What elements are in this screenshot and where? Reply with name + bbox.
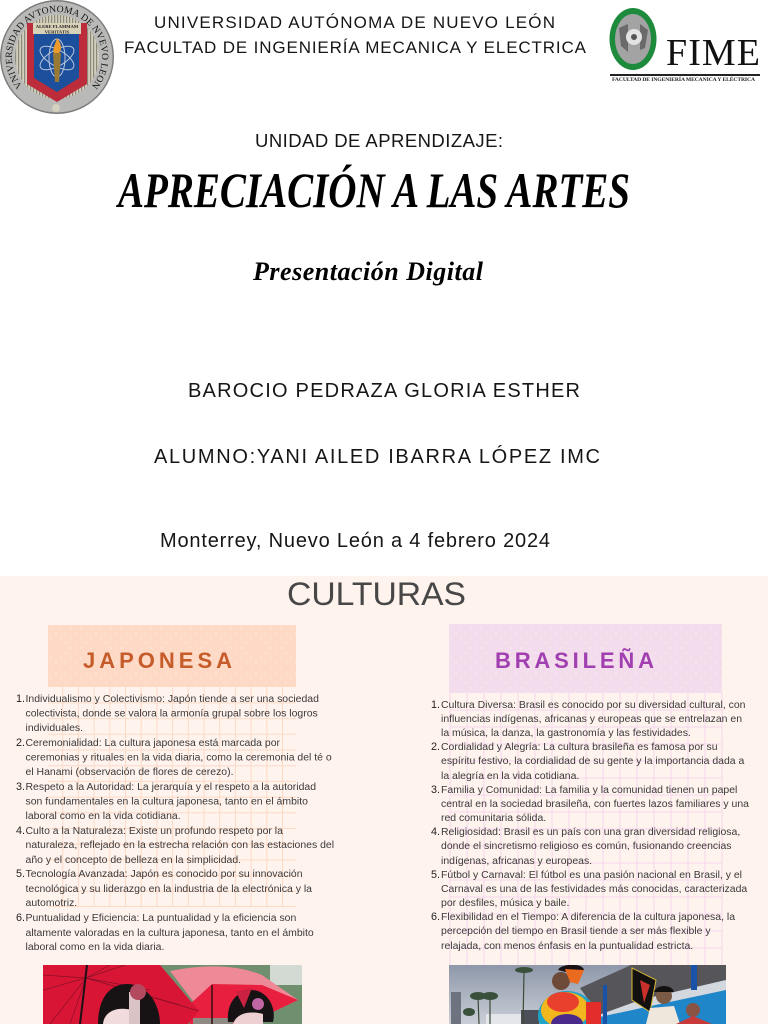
photo: geishas with red umbrellas bbox=[43, 965, 302, 1024]
list: japonesa: 5. bbox=[16, 868, 25, 880]
list: japonesa: naturaleza, reflejado en la estrecha relación con las estaciones del bbox=[26, 840, 334, 851]
list: brasileña: indígenas, africanas y europeas. bbox=[441, 856, 592, 867]
label: unidad de aprendizaje: UNIDAD DE APRENDIZAJE: bbox=[255, 130, 503, 151]
list: japonesa: Ceremonialidad: La cultura japonesa está marcada por bbox=[26, 738, 281, 749]
list: japonesa: 6. bbox=[16, 912, 25, 924]
list: brasileña: por desfiles, música y baile. bbox=[441, 898, 569, 909]
list: brasileña: Cordialidad y Alegría: La cultura brasileña es famosa por su bbox=[441, 742, 718, 753]
list: japonesa: individuales. bbox=[26, 723, 83, 734]
teacher name: BAROCIO PEDRAZA GLORIA ESTHER bbox=[188, 380, 580, 402]
icon: UANL university seal: VNIVERSIDAD AVTONOMA DE NVEVO LEON bbox=[6, 6, 108, 90]
icon: UANL university seal: VERITATIS bbox=[45, 30, 70, 34]
list: japonesa: tecnológica y su liderazgo en la industria de la electrónica y la bbox=[26, 884, 312, 895]
list: japonesa: año y el concepto de belleza en la simplicidad. bbox=[26, 855, 241, 866]
list: brasileña: Cultura Diversa: Brasil es conocido por su diversidad cultural, con bbox=[441, 700, 746, 711]
list: japonesa: son fundamentales en la cultura japonesa, tanto en el ámbito bbox=[26, 796, 308, 807]
subtitle: Presentación Digital bbox=[252, 257, 484, 286]
list: japonesa: Puntualidad y Eficiencia: La puntualidad y la eficiencia son bbox=[26, 913, 296, 924]
list: brasileña: donde el sincretismo religioso es común, fusionando creencias bbox=[441, 841, 732, 852]
list: brasileña: espíritu festivo, la cordialidad de su gente y la importancia dada a bbox=[441, 756, 745, 767]
list: japonesa bbox=[16, 693, 334, 953]
list: japonesa: laboral como en la vida cotidiana. bbox=[26, 811, 181, 822]
list: japonesa: 4. bbox=[16, 825, 25, 837]
list: japonesa: 3. bbox=[16, 781, 25, 793]
list: brasileña: 3. bbox=[431, 784, 440, 796]
list: brasileña: 5. bbox=[431, 869, 440, 881]
list: brasileña: influencias indígenas, africanas y europeas que se entrelazan en bbox=[441, 714, 742, 725]
panel: culturas background bbox=[0, 576, 768, 1024]
list: japonesa: ceremonias y rituales en la vida diaria, como la ceremonia del té o bbox=[26, 753, 332, 764]
list: brasileña: 4. bbox=[431, 826, 440, 838]
list: brasileña: Familia y Comunidad: La familia y la comunidad tienen un papel bbox=[441, 785, 737, 796]
list: brasileña: percepción del tiempo en Brasil tiende a ser más flexible y bbox=[441, 926, 711, 937]
list: japonesa: 1. bbox=[16, 693, 25, 705]
list: brasileña: 1. bbox=[431, 699, 440, 711]
panel: brasileña bbox=[431, 624, 749, 1024]
list: japonesa: altamente valoradas en la cultura japonesa, tanto en el ámbito bbox=[26, 928, 314, 939]
list: brasileña: Carnaval es una de las festividades más conocidas, caracterizada bbox=[441, 884, 747, 895]
place and date: Monterrey, Nuevo León a 4 febrero 2024 bbox=[160, 530, 550, 552]
list: brasileña: 2. bbox=[431, 741, 440, 753]
list: japonesa: Culto a la Naturaleza: Existe un profundo respeto por la bbox=[26, 826, 283, 837]
icon: FIME logo bbox=[610, 8, 760, 83]
heading: culturas: CULTURAS bbox=[287, 576, 466, 612]
icon: UANL university seal: ALERE FLAMMAM bbox=[36, 24, 79, 29]
list: japonesa: laboral como en la vida diaria. bbox=[26, 942, 164, 953]
heading box: japonesa: JAPONESA bbox=[83, 648, 232, 673]
list: japonesa: el Hanami (observación de flores de cerezo). bbox=[26, 767, 234, 778]
heading box: japonesa bbox=[48, 625, 296, 687]
student name: ALUMNO:YANI AILED IBARRA LÓPEZ IMC bbox=[154, 445, 600, 468]
list: brasileña: Flexibilidad en el Tiempo: A diferencia de la cultura japonesa, la bbox=[441, 912, 735, 923]
list: brasileña bbox=[431, 699, 749, 952]
list: japonesa: automotriz. bbox=[26, 898, 77, 909]
list: brasileña: central en la sociedad brasileña, con fuertes lazos familiares y una bbox=[441, 799, 749, 810]
list: japonesa: colectivista, donde se valora la armonía grupal sobre los logros bbox=[26, 709, 318, 720]
list: brasileña: red comunitaria sólida. bbox=[441, 813, 546, 824]
heading: university name: FACULTAD DE INGENIERÍA MECANICA Y ELECTRICA bbox=[124, 38, 587, 57]
icon: FIME logo: FIME bbox=[666, 32, 760, 74]
list: japonesa: 2. bbox=[16, 737, 25, 749]
list: brasileña: la alegría en la vida cotidiana. bbox=[441, 771, 579, 782]
heading box: brasileña: BRASILEÑA bbox=[495, 648, 654, 673]
list: japonesa: Tecnología Avanzada: Japón es conocido por su innovación bbox=[26, 869, 303, 880]
heading box: brasileña bbox=[449, 624, 722, 693]
list: brasileña: 6. bbox=[431, 911, 440, 923]
list: brasileña: la música, la danza, la gastronomía y las festividades. bbox=[441, 728, 691, 739]
photo: carnival dancers bbox=[449, 965, 726, 1024]
panel: japonesa bbox=[16, 625, 334, 1024]
list: brasileña: Fútbol y Carnaval: El fútbol es una pasión nacional en Brasil, y el bbox=[441, 870, 742, 881]
list: brasileña: relajada, con menos énfasis en la puntualidad estricta. bbox=[441, 941, 693, 952]
list: brasileña: Religiosidad: Brasil es un país con una gran diversidad religiosa, bbox=[441, 827, 740, 838]
title: course name: APRECIACIÓN A LAS ARTES bbox=[116, 162, 630, 218]
list: japonesa: Respeto a la Autoridad: La jerarquía y el respeto a la autoridad bbox=[26, 782, 316, 793]
icon: FIME logo: FACULTAD DE INGENIERÍA MECANICA Y ELÉCTRICA bbox=[612, 75, 755, 83]
heading: university name: UNIVERSIDAD AUTÓNOMA DE NUEVO LEÓN bbox=[154, 13, 555, 32]
list: japonesa: Individualismo y Colectivismo: Japón tiende a ser una sociedad bbox=[26, 694, 319, 705]
heading: university name bbox=[124, 13, 587, 57]
